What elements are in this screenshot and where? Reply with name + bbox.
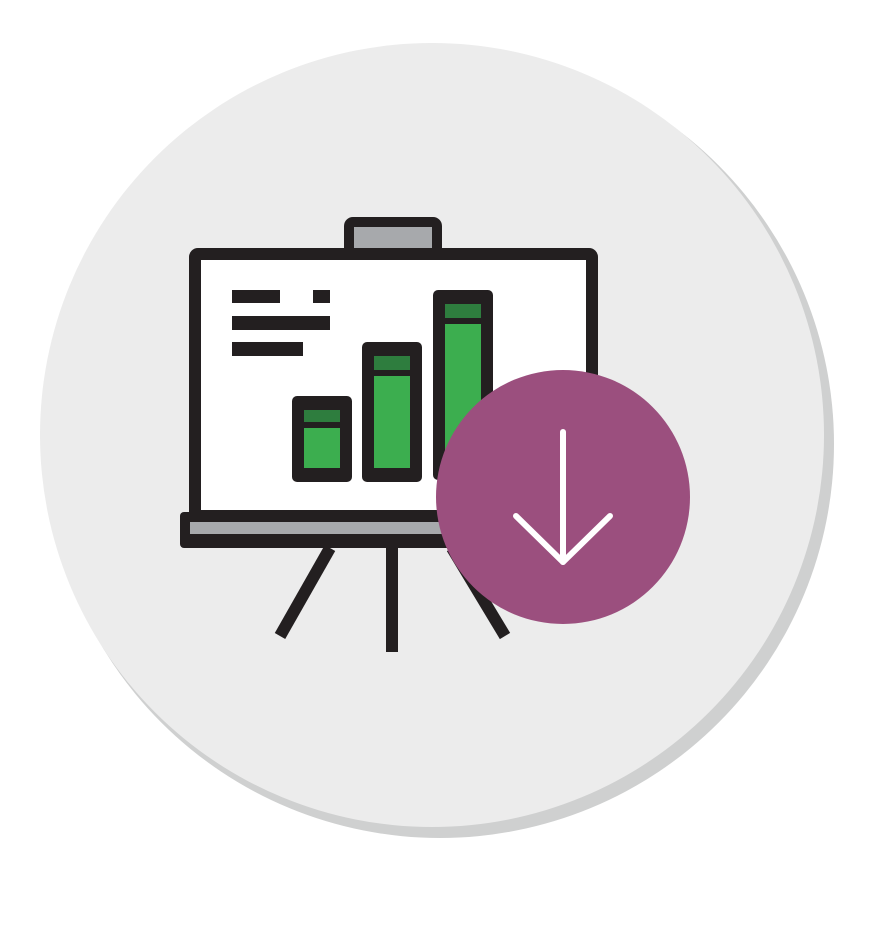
icon: presentation easel (180, 222, 592, 652)
easel legs (280, 548, 505, 652)
bar chart (292, 290, 493, 482)
icon: download badge (436, 370, 690, 624)
ledge (180, 512, 500, 548)
icon: background circle (40, 43, 834, 838)
top clip (349, 222, 437, 254)
text lines (232, 290, 330, 356)
board (195, 254, 592, 516)
arrow (516, 432, 610, 562)
